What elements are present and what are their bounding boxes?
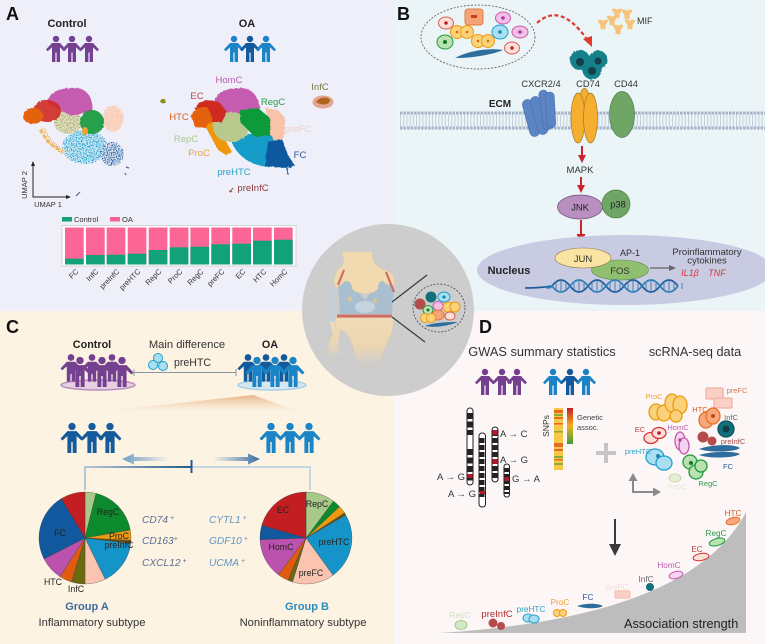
icon: control people (46, 36, 99, 62)
SNP allele labels: A → G (437, 472, 465, 483)
ranked cell type labels: EC (691, 545, 703, 554)
icon: InfC cluster (312, 96, 334, 108)
gene markers: group B: GDF10 (209, 536, 242, 547)
ranked cell type labels: RegC (706, 529, 727, 538)
genetic association scale (567, 408, 573, 444)
ranked cell type labels: HTC (725, 509, 741, 518)
panel letter C: C (6, 317, 19, 337)
caption: group A (39, 601, 145, 629)
SNP allele labels: A → G (500, 455, 528, 466)
genes: IL1β and TNF (681, 268, 726, 278)
receptor: CD44 (610, 92, 634, 138)
ranked cell type labels: FC (583, 593, 594, 602)
icon: OA people (543, 369, 596, 395)
ranked cell type labels: preFC (606, 583, 628, 592)
receptor labels: CD74 (576, 79, 600, 89)
SNP heat strip (554, 408, 563, 470)
panel B: signalling pathway (394, 0, 765, 311)
gene markers: group B: + (239, 558, 245, 565)
arrow: CD74 to MAPK (578, 146, 586, 163)
panel letter D: D (479, 317, 492, 337)
ranked cell type labels: ProC (551, 598, 569, 607)
cell population in dashed ellipse (421, 5, 535, 69)
heading: Control: Control (47, 18, 87, 30)
receptor: CXCR2/4 (521, 89, 556, 138)
DNA helix (525, 280, 682, 292)
heading: Control: Control (73, 339, 111, 351)
ranked cell type labels: InfC (638, 575, 654, 584)
caption: group B (240, 601, 366, 629)
bar chart category labels: EC (234, 267, 248, 281)
label: Main difference: Main difference (149, 339, 225, 351)
label: Association strength: Association strength (624, 617, 738, 631)
label: Genetic assoc.: assoc. (577, 423, 599, 432)
UMAP axes (20, 161, 71, 209)
pie A labels: RegC (97, 507, 120, 517)
cluster labels on OA UMAP: RepC (174, 134, 198, 145)
heading: scRNA-seq data: scRNA-seq data (649, 345, 742, 359)
receptor labels: CD44 (614, 79, 638, 89)
chromosomes (467, 408, 510, 507)
pie B labels: preFC (299, 568, 324, 578)
gene markers: group B: + (242, 536, 248, 543)
arrow: toward group B (213, 454, 260, 464)
gene markers: group A: CD74 (142, 515, 168, 526)
SNP allele labels: G → A (512, 474, 541, 485)
icon: MIF trimers (598, 10, 634, 34)
icon: group B people (260, 423, 320, 453)
bar chart category labels: ProC (166, 267, 185, 286)
p38 node: p38 (610, 200, 626, 210)
gene markers: group B: UCMA (209, 558, 239, 569)
difference connector (134, 369, 236, 376)
ranked cell type labels: RepC (450, 611, 471, 620)
callout lines (392, 275, 427, 342)
arrow: AP-1 to cytokines (650, 265, 676, 271)
ranked cell type labels: preHTC (517, 605, 545, 614)
label: Genetic assoc.: Genetic (577, 413, 603, 422)
gene markers: group A: CXCL12 (142, 558, 181, 569)
chart: OA UMAP (160, 88, 295, 192)
bar chart category labels: preInfC (98, 267, 122, 291)
gene markers: group A: + (174, 536, 178, 543)
icon: group A people (60, 423, 122, 453)
cell cluster labels: HomC (667, 423, 689, 432)
label: preHTC: preHTC (174, 357, 211, 369)
cluster labels on OA UMAP: RegC (261, 97, 285, 108)
icon: OA people (224, 36, 276, 62)
pie B labels (269, 499, 350, 578)
pie A labels: InfC (68, 584, 85, 594)
cell cluster labels: EC (635, 425, 646, 434)
label: AP-1: AP-1 (620, 248, 640, 258)
JUN and FOS complex: FOS (610, 266, 630, 277)
receptor labels: CXCR2/4 (521, 79, 561, 89)
panel A: UMAP of control and OA (0, 0, 394, 311)
stacked bar chart legend: OA (122, 215, 133, 224)
caption: group B: Group B (285, 601, 329, 613)
label: Nucleus: Nucleus (488, 265, 530, 277)
genes: IL1β and TNF: TNF (708, 268, 726, 278)
UMAP axes: UMAP 1 (34, 200, 62, 209)
pie B labels: EC (277, 505, 290, 515)
OA cohort (238, 354, 306, 390)
panel letter A: A (6, 4, 19, 24)
p38 node (602, 190, 630, 218)
cluster labels on OA UMAP: HomC (216, 75, 243, 86)
JNK node (558, 195, 602, 219)
caption: group A: Group A (65, 601, 109, 613)
pie A labels: HTC (44, 577, 63, 587)
pie B labels: HomC (269, 542, 294, 552)
ranked cell type labels: HomC (657, 561, 681, 570)
caption: group B: Noninflammatory subtype (240, 617, 366, 629)
bar chart category labels: InfC (84, 267, 101, 283)
gene markers: group A (142, 515, 187, 569)
icon: plus sign (596, 443, 616, 463)
heading: GWAS summary statistics: GWAS summary statistics (468, 344, 616, 359)
cell cluster labels: RegC (698, 479, 718, 488)
pie A labels: ProC (109, 531, 130, 541)
pie A labels (44, 507, 134, 594)
zoom wedge (97, 395, 297, 412)
cell cluster labels: preFC (727, 386, 748, 395)
gene markers: group B: + (241, 515, 247, 522)
label: ECM: ECM (489, 99, 511, 110)
cluster labels on OA UMAP (169, 75, 329, 194)
bar chart category labels: RegC (185, 267, 206, 287)
gene markers: group B: CYTL1 (209, 515, 241, 526)
cluster labels on OA UMAP: preFC (285, 124, 311, 135)
cell cluster inset (413, 284, 465, 332)
subtype divider (85, 460, 310, 490)
arrow: JNK to nucleus (576, 220, 586, 243)
arrow: toward group A (122, 454, 170, 464)
gene markers: group A: CD163 (142, 536, 174, 547)
cluster labels on OA UMAP: EC (190, 91, 204, 102)
pie A labels: preInfC (105, 540, 134, 550)
pie chart: group A (39, 492, 131, 584)
pie B labels: RepC (306, 499, 329, 509)
SNP allele labels: A → C (500, 429, 528, 440)
bar chart category labels: FC (67, 267, 81, 280)
arrow: down to association (609, 519, 621, 556)
receptor: CD74 (571, 88, 598, 143)
label: MAPK: MAPK (567, 165, 594, 176)
panel D: GWAS integration (394, 311, 765, 644)
bar chart category labels: HTC (251, 267, 269, 284)
nucleus (477, 235, 765, 305)
cell cluster labels: ProC (645, 392, 663, 401)
panel C: patient subtypes (0, 311, 394, 644)
panel letter B: B (397, 4, 410, 24)
SNP allele labels: A → G (448, 489, 476, 500)
cell cluster labels: preInfC (721, 437, 746, 446)
central circle: knee joint (302, 224, 474, 396)
bar chart category labels: preFC (205, 267, 227, 288)
heading: OA: OA (262, 339, 278, 351)
cell cluster labels: HTC (692, 405, 708, 414)
label: MIF: MIF (637, 16, 653, 26)
cluster labels on OA UMAP: ProC (188, 148, 210, 159)
ranked cell type labels (450, 509, 741, 620)
association strength curve (440, 512, 746, 633)
JNK node: JNK (571, 202, 590, 212)
cluster labels on OA UMAP: InfC (311, 82, 329, 93)
icon: preHTC cells (148, 354, 168, 370)
knee illustration (328, 252, 395, 365)
cluster labels on OA UMAP: preInfC (237, 183, 269, 194)
arrow: secretion to CD74 (537, 15, 592, 47)
pie A labels: FC (54, 528, 67, 538)
arrow: MAPK to JNK (577, 177, 585, 193)
gene markers: group B (209, 515, 248, 569)
gene markers: group A: + (181, 558, 187, 565)
stacked bar chart (62, 226, 296, 266)
bar chart category labels: preHTC (117, 267, 143, 292)
cell membrane (400, 113, 765, 128)
UMAP axes icon (628, 473, 661, 496)
heading: OA: OA (239, 18, 255, 30)
stacked bar chart legend (62, 215, 133, 224)
receptor labels (521, 79, 638, 89)
SNP allele labels (437, 429, 541, 500)
icon: teal cells on CD74 (570, 50, 608, 80)
chart: control UMAP (23, 88, 129, 196)
pie chart: group B (260, 492, 352, 584)
icon: control people (475, 369, 527, 395)
cluster labels on OA UMAP: HTC (169, 112, 189, 123)
ranked cell types on curve (455, 516, 741, 630)
pie B labels: preHTC (319, 537, 350, 547)
caption: group A: Inflammatory subtype (39, 617, 145, 629)
bar chart category labels (67, 267, 290, 292)
stacked bar chart legend: Control (74, 215, 99, 224)
gene markers: group A: + (168, 515, 174, 522)
cell cluster labels: RepC (667, 482, 687, 491)
cell cluster labels: preHTC (625, 447, 652, 456)
cell cluster labels: InfC (724, 413, 738, 422)
bar chart category labels: RepC (143, 267, 164, 287)
label: SNPs: SNPs (541, 415, 551, 437)
genes: IL1β and TNF: IL1β (681, 268, 699, 278)
cluster labels on OA UMAP: FC (294, 150, 306, 161)
label: Proinflammatory cytokines: cytokines (687, 256, 727, 266)
cell clusters (644, 388, 740, 482)
cluster labels on OA UMAP: preHTC (217, 167, 251, 178)
cell cluster labels: FC (723, 462, 734, 471)
control cohort (60, 354, 135, 390)
JUN and FOS complex (555, 248, 648, 280)
bar chart category labels: HomC (268, 267, 290, 288)
UMAP axes: UMAP 2 (20, 171, 29, 199)
label: Proinflammatory cytokines: Proinflammatory (672, 247, 742, 258)
cell cluster labels (625, 386, 748, 491)
JUN and FOS complex: JUN (574, 254, 592, 265)
ranked cell type labels: preInfC (481, 609, 513, 620)
